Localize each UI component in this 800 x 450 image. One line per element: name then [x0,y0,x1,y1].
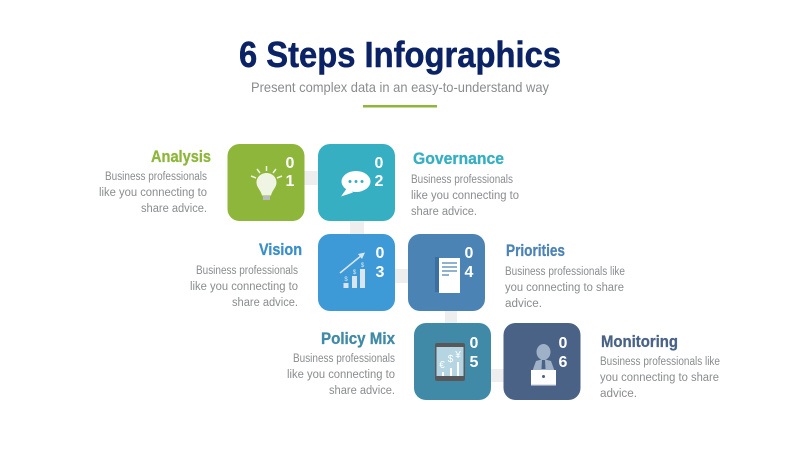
description: share advice. [141,203,207,215]
number 01: 0 [286,155,295,172]
description [411,174,519,218]
number 01: 1 [286,173,295,190]
step 4: Priorities [408,234,625,311]
icon: tablet with currency chart [435,343,465,381]
number 01 [286,155,295,190]
number 03 [376,245,385,281]
icon: tablet with currency chart: € [439,360,445,371]
heading: Priorities [506,241,565,260]
step 2: Governance [318,144,519,221]
number 02: 2 [375,173,384,190]
number 05 [470,335,479,371]
description: like you connecting to [411,190,519,202]
description: Business professionals [411,174,513,186]
number 05: 0 [470,335,479,352]
icon: growth chart: $ [353,270,357,276]
number 03: 3 [376,264,385,281]
heading: Vision [259,240,302,259]
heading: Monitoring [601,332,678,351]
icon: growth chart: $ [344,277,348,283]
icon: person at laptop [531,344,556,386]
number 06: 0 [559,335,568,352]
number 04: 0 [465,245,474,262]
title underline [363,105,437,108]
description: share advice. [329,385,395,397]
number 03: 0 [376,245,385,262]
description: Business professionals [293,353,395,365]
heading: Governance [413,149,504,168]
description: Business professionals like [600,356,720,368]
card 2 [318,144,395,221]
description [287,353,395,397]
description: Business professionals [196,265,298,277]
description [505,266,625,310]
card 5 [414,323,491,400]
title: 6 Steps Infographics [239,34,561,75]
icon: growth chart [340,252,365,288]
card 4 [408,234,485,311]
number 04 [465,245,474,281]
description: like you connecting to [287,369,395,381]
icon: tablet with currency chart: $ [448,354,454,365]
step 5: Policy Mix [287,323,491,400]
description: advice. [505,298,542,310]
icon: speech bubble [341,171,370,196]
description: advice. [600,388,637,400]
description: like you connecting to [190,281,298,293]
description [600,356,720,400]
number 06 [559,335,568,371]
card 1 [228,144,304,221]
description [99,171,207,215]
icon: tablet with currency chart: ¥ [454,350,461,361]
card 3 [318,234,395,311]
step 6: Monitoring [504,323,720,400]
step 3: Vision [190,234,395,311]
description: you connecting to share [600,372,719,384]
icon: growth chart: $ [361,263,365,269]
number 02: 0 [375,155,384,172]
number 05: 5 [470,354,479,371]
heading: Analysis [151,147,211,166]
icon: notebook [435,257,460,293]
connectors between step cards [304,171,504,382]
heading: Policy Mix [321,329,395,348]
number 02 [375,155,384,190]
description: Business professionals [105,171,207,183]
icon: light bulb [251,166,282,200]
description: share advice. [411,206,477,218]
description: share advice. [232,297,298,309]
description: like you connecting to [99,187,207,199]
description: Business professionals like [505,266,625,278]
card 6 [504,323,580,400]
number 04: 4 [465,264,474,281]
subtitle: Present complex data in an easy-to-understand way [251,79,549,95]
step 1: Analysis [99,144,304,221]
description [190,265,298,309]
description: you connecting to share [505,282,624,294]
number 06: 6 [559,354,568,371]
